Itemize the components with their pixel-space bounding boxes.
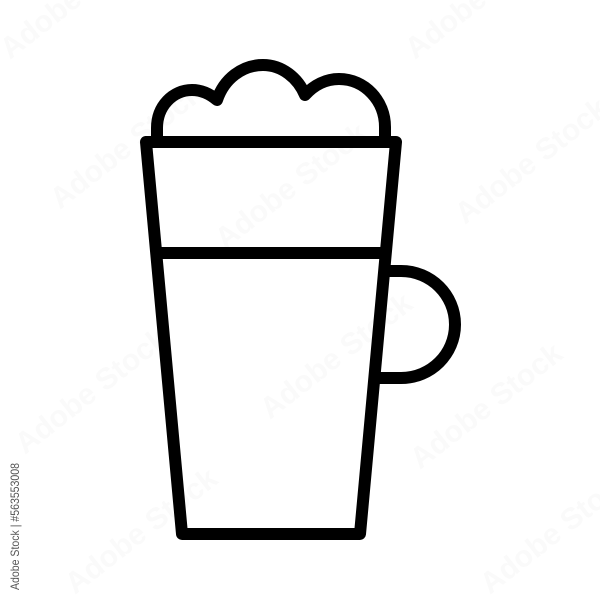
mug handle (375, 271, 455, 378)
faint stock watermarks: Adobe Stock (59, 461, 224, 600)
faint stock watermarks: Adobe Stock (209, 116, 374, 256)
faint stock watermarks: Adobe Stock (254, 286, 419, 426)
icon: latte glass with foam (146, 65, 455, 534)
stock id caption: Adobe Stock | #563553008 (8, 463, 22, 590)
faint stock watermarks: Adobe Stock (9, 321, 174, 461)
faint stock watermarks: Adobe Stock (44, 76, 209, 216)
foam outline (157, 65, 385, 136)
liquid level line (157, 247, 385, 259)
glass body (146, 142, 396, 534)
faint stock watermarks: Adobe Stock (404, 336, 569, 476)
